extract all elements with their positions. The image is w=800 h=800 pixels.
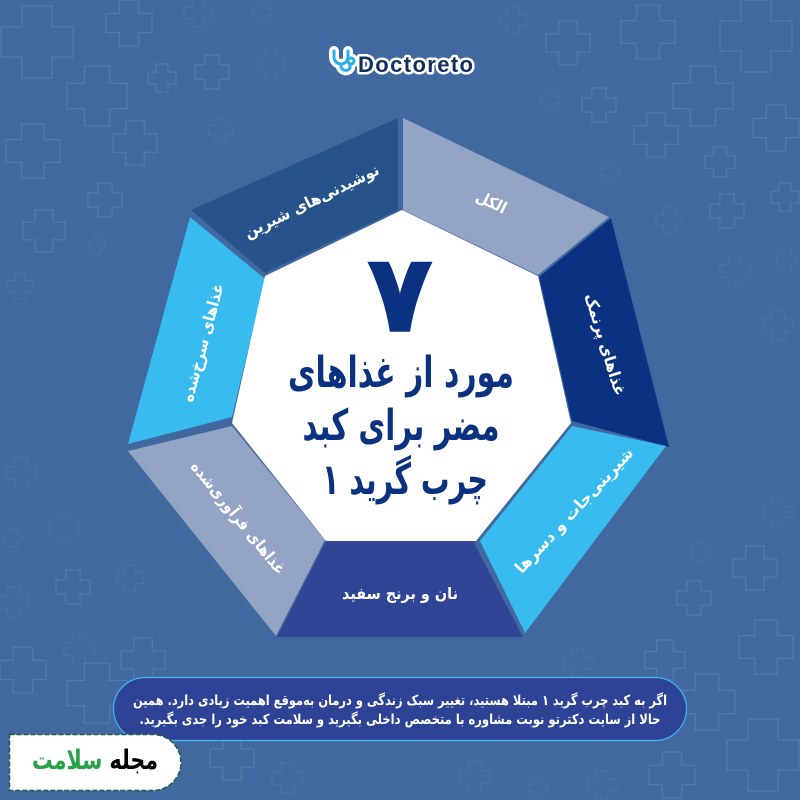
badge: health magazine [10,734,181,790]
panel: salty foods [539,218,669,447]
panel: fried foods [128,217,265,444]
panel: salty foods: غذاهای پرنمک [580,291,630,398]
title text: مضر برای کبد [302,401,500,451]
callout: advice text [114,678,686,740]
panel: bread and white rice: نان و برنج سفید [342,584,458,603]
panel: sweets and desserts: شیرینی‌جات و دسرها [511,443,637,577]
panel: sweet drinks: نوشیدنی‌های شیرین [241,160,382,242]
panel: sweets and desserts [480,426,666,633]
title text: چرب گرید ۱ [322,454,488,505]
big number 7: ۷ [367,232,433,357]
panel: processed foods: غذاهای فرآوری‌شده [187,457,290,578]
panel: alcohol: الکل [473,187,510,218]
panel: processed foods [128,426,325,636]
center heptagon with title [232,210,571,541]
panel: sweet drinks [191,118,398,273]
callout: advice text: حالا از سایت دکترتو نوبت مشاوره با متخصص داخلی بگیرید و سلامت کبد خود را جدی بگیرید. [140,711,660,728]
callout: advice text: اگر به کبد چرب گرید ۱ مبتلا هستید، تغییر سبک زندگی و درمان به‌موقع اهمیت زیادی دارد. همین [133,692,667,709]
title text: مورد از غذاهای [288,348,514,398]
panel: bread and white rice [277,541,523,637]
panel: fried foods: غذاهای سرخ‌شده [178,281,228,404]
panel: alcohol [403,118,609,275]
badge: health magazine: مجله سلامت [32,745,158,776]
title text [288,348,514,505]
logo: Doctoreto: Doctoreto [358,52,473,77]
